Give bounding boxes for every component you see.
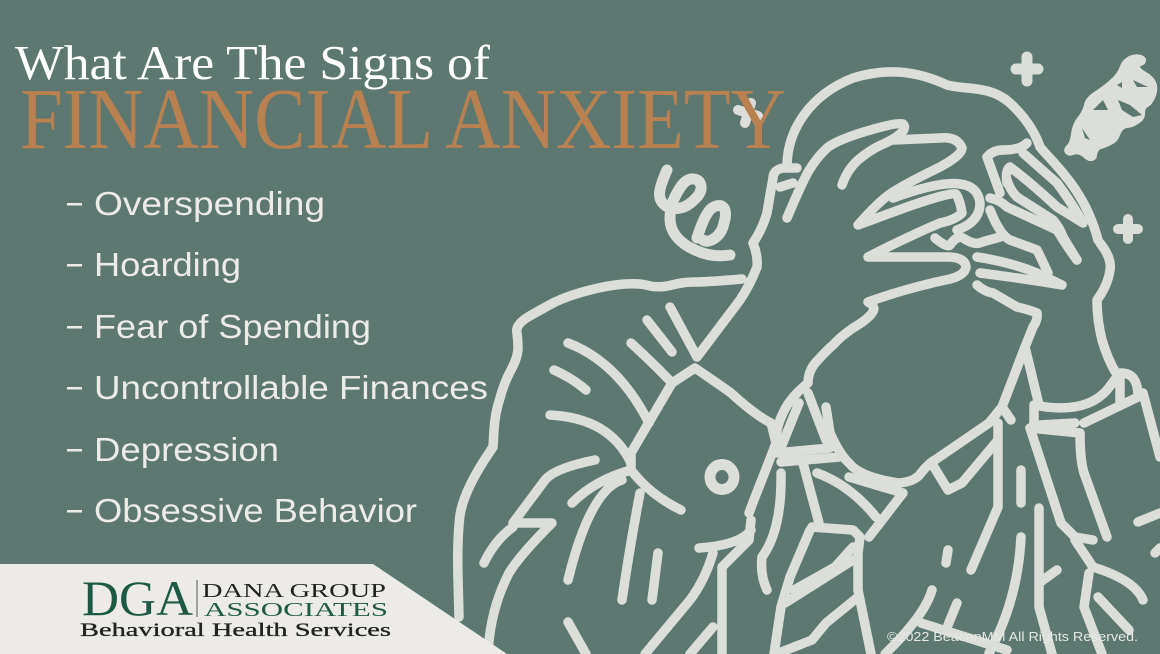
right arm outer edge	[1097, 243, 1116, 373]
cuff	[1030, 373, 1138, 433]
sign: obsessive behavior: Obsessive Behavior	[94, 492, 417, 529]
illustration: stressed man holding head	[458, 54, 1160, 654]
jacket marks	[885, 470, 1057, 654]
title line 2: FINANCIAL ANXIETY	[20, 70, 786, 167]
title line 1: What Are The Signs of	[15, 35, 491, 90]
sign: depression: Depression	[94, 431, 279, 468]
sign: hoarding: Hoarding	[94, 246, 241, 283]
neck line	[697, 168, 797, 357]
squiggle right	[1064, 54, 1157, 161]
collar hair lines	[550, 307, 697, 463]
list of signs	[67, 185, 488, 529]
small wiggle between fingers	[935, 237, 1000, 246]
logo panel	[0, 564, 507, 654]
knuckle line	[893, 184, 980, 230]
fingers of left hand	[749, 138, 966, 513]
right hand fingers	[977, 210, 1062, 347]
sign: uncontrollable finances: Uncontrollable Finances	[94, 369, 488, 406]
logo associates: ASSOCIATES	[204, 599, 388, 621]
head outline	[787, 72, 1098, 240]
sleeve right	[1030, 393, 1160, 553]
logo DGA mark: DGA	[82, 570, 193, 626]
sleeve shape	[568, 368, 776, 600]
sign: fear of spending: Fear of Spending	[94, 308, 371, 345]
logo tagline: Behavioral Health Services	[80, 620, 391, 641]
copyright: ©2022 BeaconMM All Rights Reserved.	[887, 629, 1138, 644]
cufflink	[710, 464, 734, 490]
collar and tie	[776, 347, 1039, 483]
plus right	[1118, 219, 1138, 239]
plus top	[1016, 57, 1038, 81]
lower torso	[645, 473, 781, 654]
sign: overspending: Overspending	[94, 185, 325, 222]
plus behind title	[738, 103, 758, 123]
forehead and first finger	[787, 124, 904, 218]
squiggle left	[659, 170, 730, 256]
logo name: DANA GROUP	[202, 580, 386, 602]
arm folds	[484, 460, 595, 654]
shoulder and back	[458, 279, 742, 617]
